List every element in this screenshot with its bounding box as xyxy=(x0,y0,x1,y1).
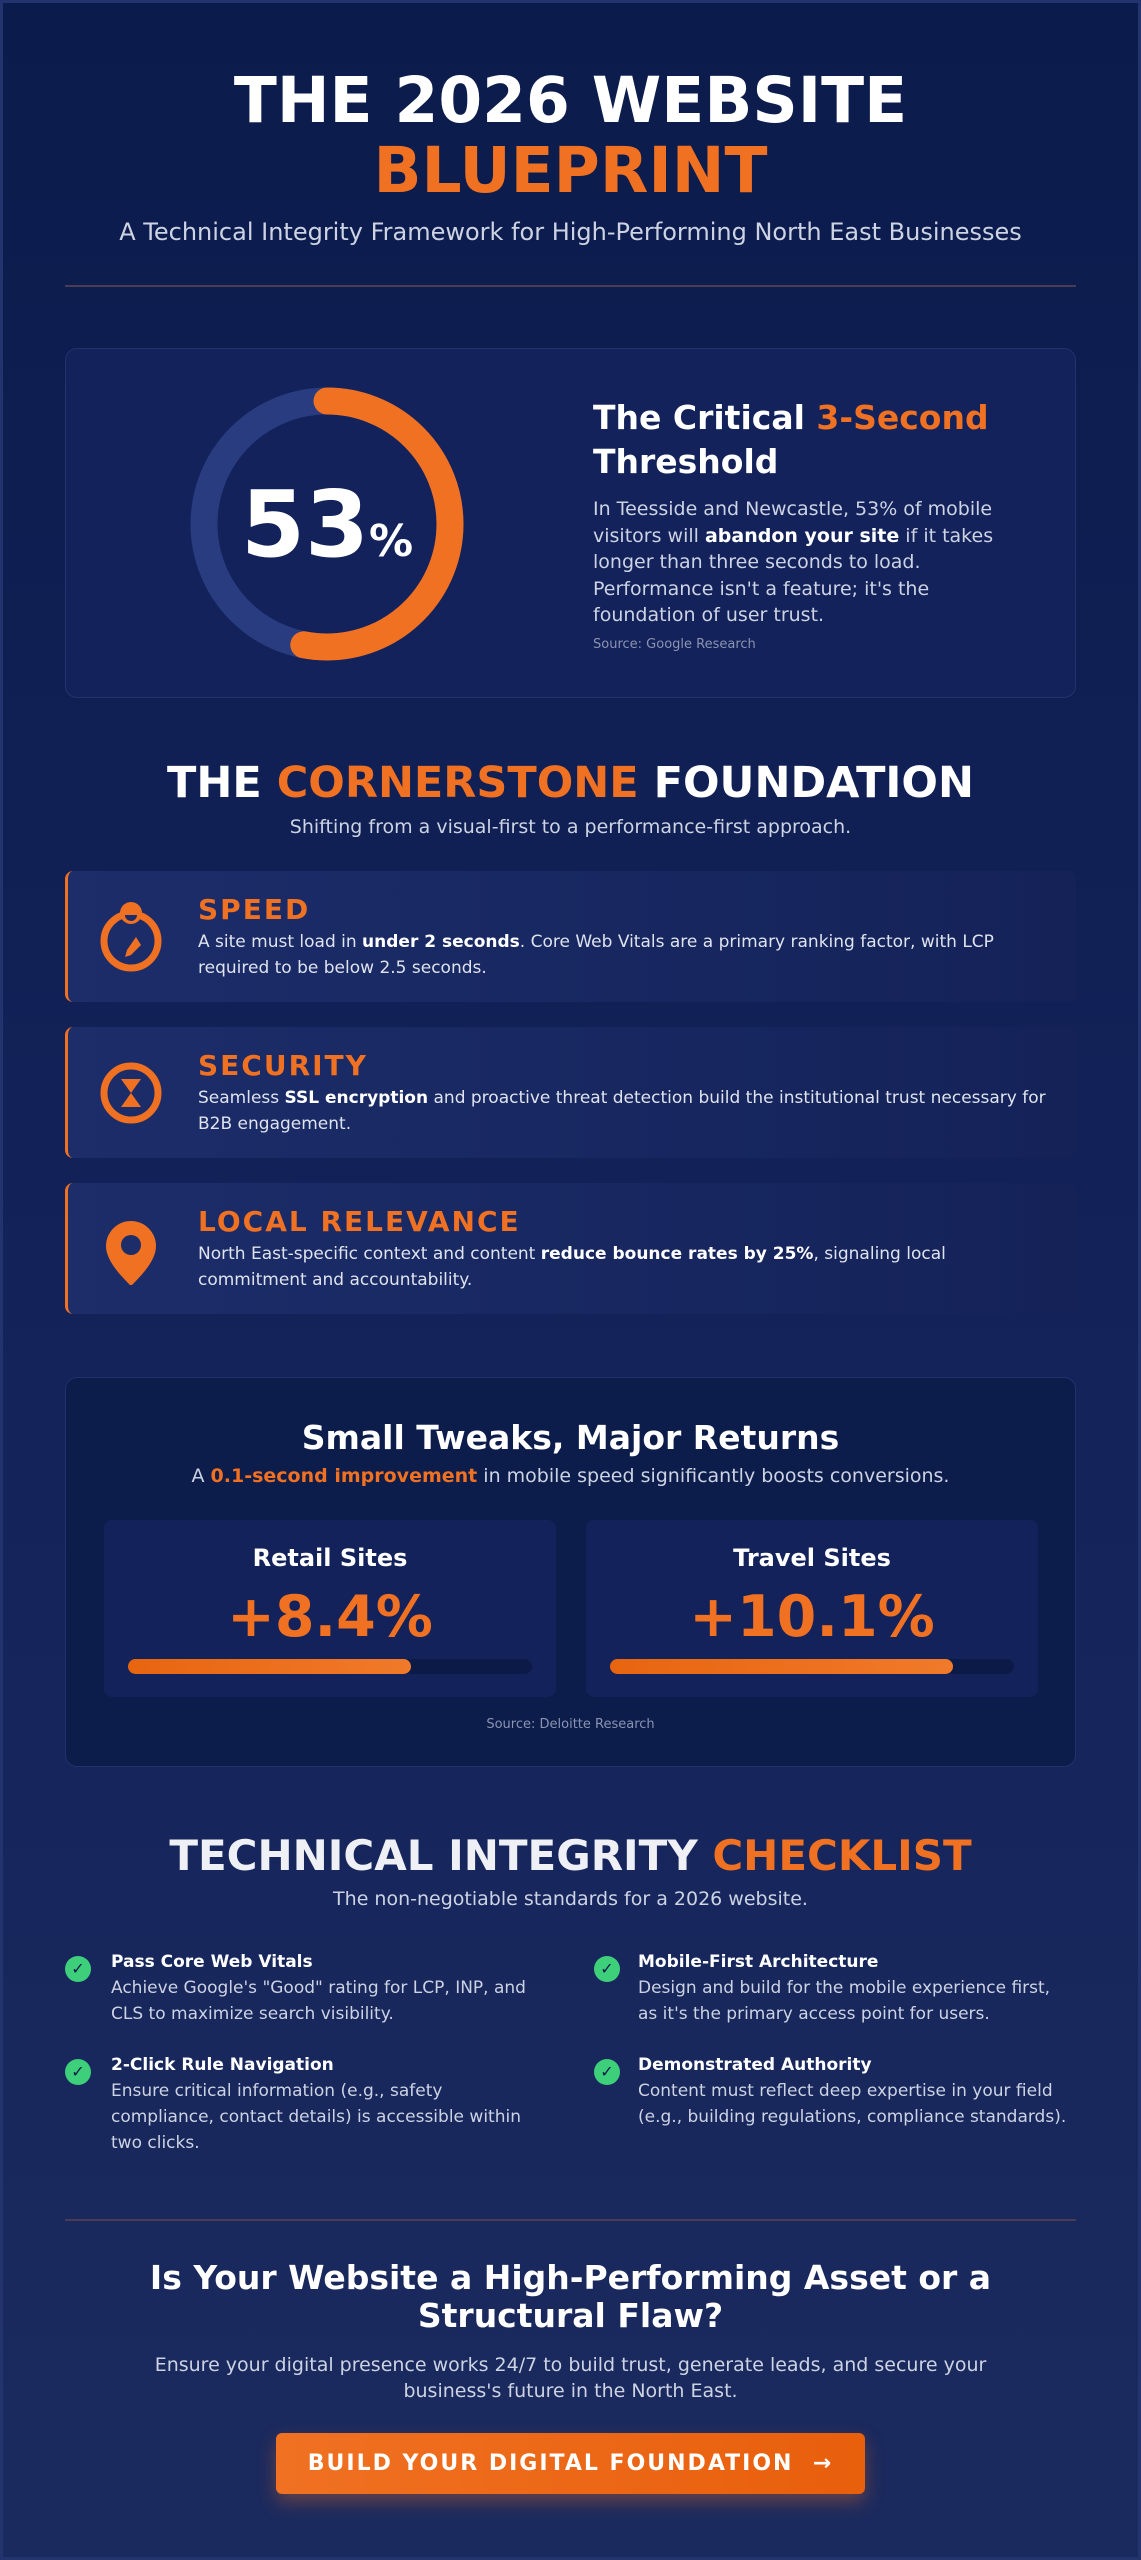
bar xyxy=(610,1659,1014,1674)
title: SPEED xyxy=(198,893,310,926)
heading: Small Tweaks, Major Returns xyxy=(302,1418,839,1457)
text block: In Teesside and Newcastle, 53% of mobile visitors will abandon your site if it takes longer than three seconds to load. Performance isn't a feature; it's the foundation of user trust. xyxy=(593,498,993,626)
checklist item: Content must reflect deep expertise in your field (e.g., building regulations, compliance standards). xyxy=(638,2081,1066,2127)
button xyxy=(276,2433,865,2494)
panel: local relevance xyxy=(65,1183,1076,1314)
panel: speed xyxy=(65,871,1076,1002)
checklist item: ✓ xyxy=(600,1959,614,1978)
stat: retail xyxy=(104,1520,556,1697)
checklist item: 2-Click Rule Navigation xyxy=(111,2055,334,2075)
checklist item: Ensure critical information (e.g., safety compliance, contact details) is accessible within two clicks. xyxy=(111,2081,521,2153)
stat: travel: +10.1% xyxy=(689,1584,935,1650)
heading: cornerstone: THE CORNERSTONE FOUNDATION xyxy=(167,758,974,808)
donut chart: 53% xyxy=(241,471,413,578)
panel: 3-second threshold xyxy=(65,348,1076,698)
CTA heading xyxy=(150,2258,991,2335)
CTA text xyxy=(155,2354,986,2402)
donut chart xyxy=(190,388,464,660)
subtitle: Shifting from a visual-first to a performance-first approach. xyxy=(290,816,851,838)
button: BUILD YOUR DIGITAL FOUNDATION → xyxy=(308,2451,833,2476)
text: North East-specific context and content reduce bounce rates by 25%, signaling local commitment and accountability. xyxy=(198,1244,946,1290)
heading: The Critical 3-Second xyxy=(593,398,989,437)
checklist item xyxy=(65,2055,521,2153)
text: A site must load in under 2 seconds. Core Web Vitals are a primary ranking factor, with LCP required to be below 2.5 seconds. xyxy=(198,932,994,978)
subtitle: A Technical Integrity Framework for High-Performing North East Businesses xyxy=(119,218,1022,246)
icon: shield xyxy=(100,1062,162,1124)
CTA text: business's future in the North East. xyxy=(403,2380,738,2402)
stat: retail: Retail Sites xyxy=(253,1544,407,1572)
checklist item: ✓ xyxy=(71,1959,85,1978)
title xyxy=(234,64,907,207)
title: SECURITY xyxy=(198,1049,368,1082)
panel: small tweaks xyxy=(65,1377,1076,1767)
bar xyxy=(128,1659,532,1674)
icon: stopwatch xyxy=(100,902,162,972)
heading: checklist: TECHNICAL INTEGRITY CHECKLIST xyxy=(169,1831,972,1880)
checklist item: ✓ xyxy=(600,2062,614,2081)
checklist item: Design and build for the mobile experience first, as it's the primary access point for users. xyxy=(638,1978,1050,2024)
source: Source: Deloitte Research xyxy=(486,1717,655,1732)
subtitle: The non-negotiable standards for a 2026 website. xyxy=(333,1888,808,1910)
title: BLUEPRINT xyxy=(374,134,767,207)
stat: travel: Travel Sites xyxy=(733,1544,891,1572)
checklist item xyxy=(594,2055,1066,2127)
stat: retail: +8.4% xyxy=(227,1584,433,1650)
checklist item: Mobile-First Architecture xyxy=(638,1952,878,1972)
heading: Threshold xyxy=(593,442,778,481)
stat: travel xyxy=(586,1520,1038,1697)
checklist item: Achieve Google's "Good" rating for LCP, INP, and CLS to maximize search visibility. xyxy=(111,1978,526,2024)
CTA heading: Structural Flaw? xyxy=(418,2296,723,2335)
checklist item xyxy=(594,1952,1050,2024)
checklist item: ✓ xyxy=(71,2062,85,2081)
CTA text: Ensure your digital presence works 24/7 to build trust, generate leads, and secure your xyxy=(155,2354,986,2376)
CTA heading: Is Your Website a High-Performing Asset or a xyxy=(150,2258,991,2297)
checklist item: Pass Core Web Vitals xyxy=(111,1952,313,1972)
heading xyxy=(593,398,989,481)
checklist item xyxy=(65,1952,526,2024)
source: Source: Google Research xyxy=(593,637,756,652)
title: THE 2026 WEBSITE xyxy=(234,64,907,137)
text: Seamless SSL encryption and proactive threat detection build the institutional trust necessary for B2B engagement. xyxy=(198,1088,1046,1134)
panel: security xyxy=(65,1027,1076,1158)
icon: map pin xyxy=(106,1221,156,1285)
checklist item: Demonstrated Authority xyxy=(638,2055,872,2075)
title: LOCAL RELEVANCE xyxy=(198,1205,521,1238)
subtitle: A 0.1-second improvement in mobile speed significantly boosts conversions. xyxy=(192,1465,949,1487)
